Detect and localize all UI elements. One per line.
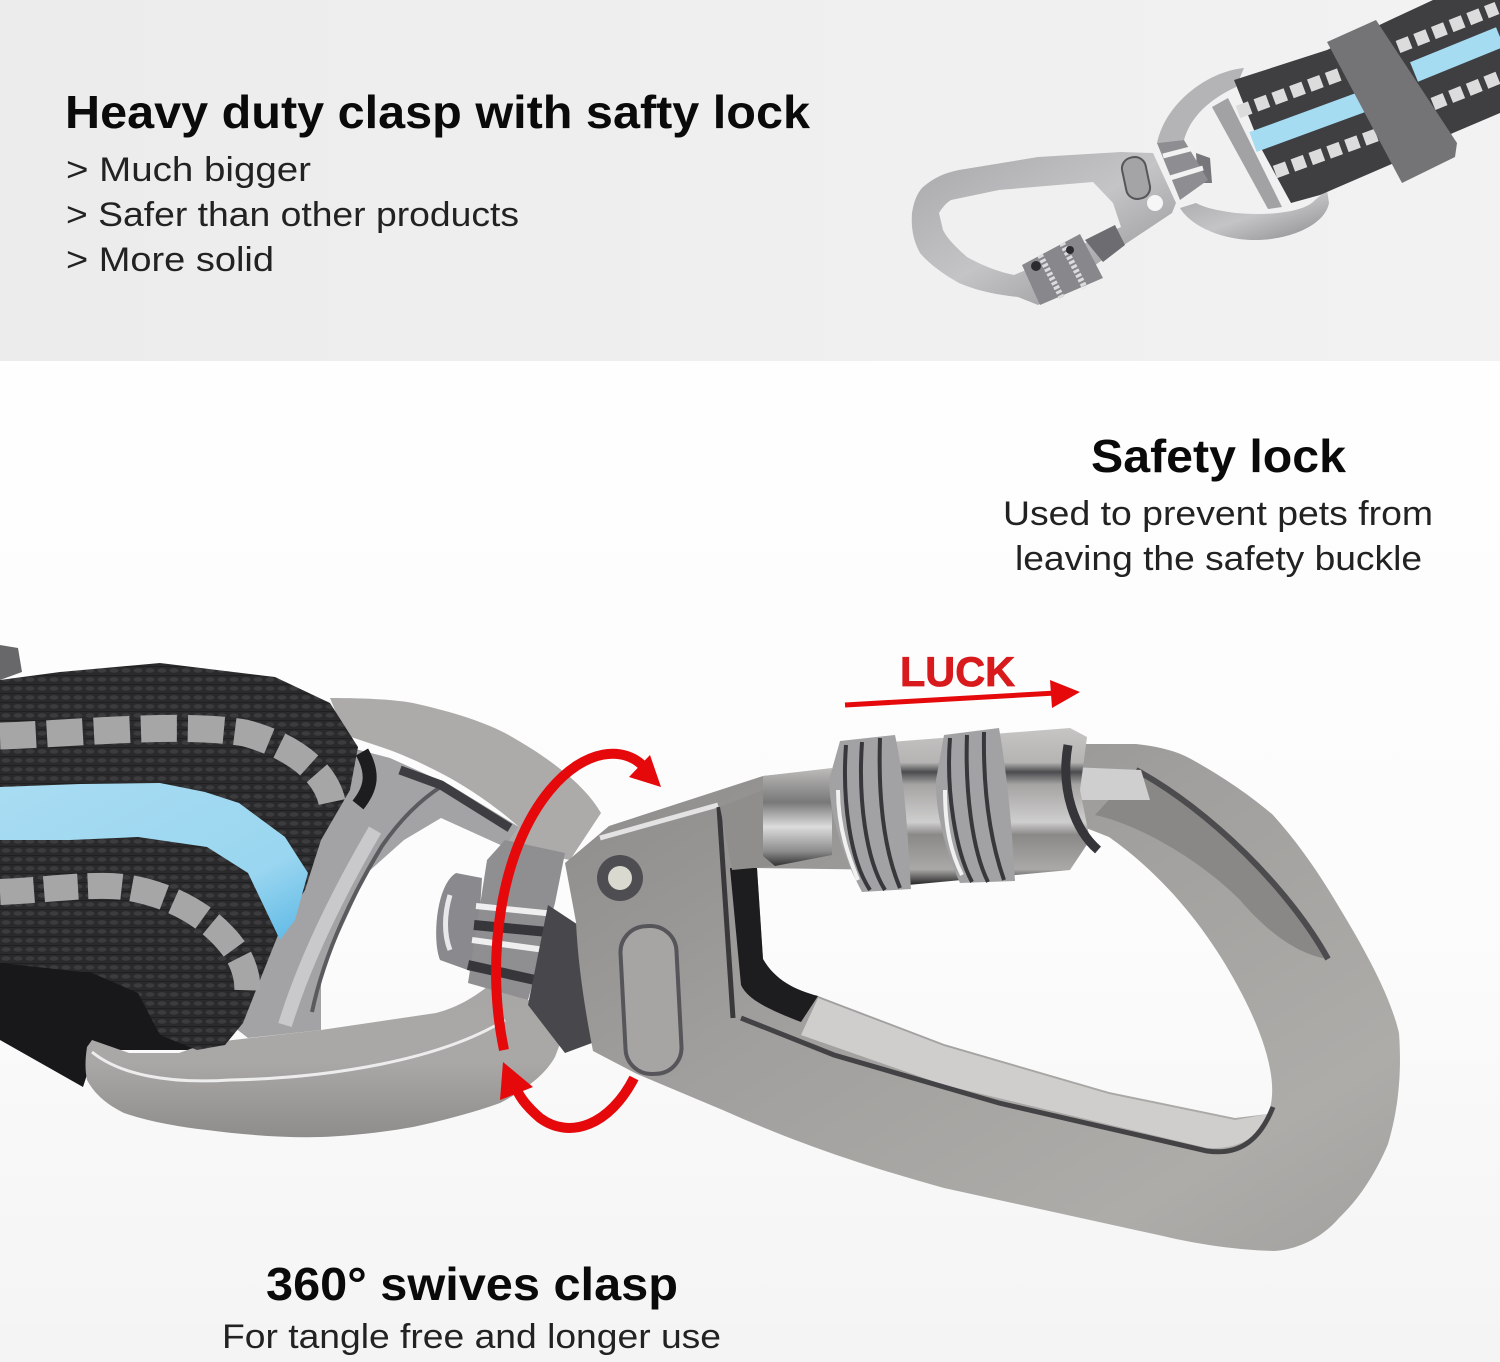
- text block: clasp benefits: > Much bigger: [66, 151, 311, 189]
- barrel body: [860, 728, 1090, 885]
- small swivel ring: [1157, 68, 1329, 240]
- text block: safety lock description: Used to prevent pets from: [1003, 495, 1433, 533]
- crossbar highlights: [285, 752, 510, 1025]
- arrow: lower rotation: [500, 1062, 634, 1128]
- inner dark edge: [741, 1018, 1273, 1152]
- swivel ring top band: [330, 698, 601, 860]
- upper plate highlight: [600, 805, 718, 838]
- swivel post: [436, 840, 601, 1053]
- text block: clasp benefits: [66, 151, 519, 279]
- product photo: small clasp and strap: [912, 0, 1500, 305]
- arrow: lock direction: [845, 680, 1080, 708]
- black gate recess: [730, 868, 818, 1022]
- heading: 360 swivel clasp: 360° swives clasp: [266, 1258, 678, 1310]
- small lock barrel: [1022, 225, 1125, 305]
- strap body: [0, 663, 358, 1050]
- ring left: [829, 735, 911, 892]
- heading: heavy duty clasp: Heavy duty clasp with safty lock: [65, 86, 810, 138]
- lock barrel: [829, 728, 1098, 892]
- hook upper shading: [1095, 770, 1328, 959]
- inner wall: [801, 998, 1268, 1148]
- text block: swivel description: For tangle free and longer use: [222, 1318, 721, 1356]
- swivel ring bottom band: [86, 987, 574, 1137]
- small keeper loop: [1327, 20, 1457, 183]
- small hole: [1147, 195, 1163, 211]
- gate plate: [720, 790, 775, 870]
- hook dark edge: [1136, 770, 1328, 959]
- reflective band upper: [0, 728, 332, 802]
- blue stripe: [0, 783, 308, 940]
- barrel gap: [1066, 745, 1098, 850]
- strap back loop: [0, 955, 205, 1087]
- panel: top background: [0, 0, 1500, 361]
- arrow: upper rotation: [496, 754, 661, 1050]
- ring edge highlight: [92, 1020, 505, 1081]
- slot: [619, 925, 683, 1075]
- label: luck: LUCK: [900, 648, 1015, 695]
- carabiner body: [565, 744, 1400, 1251]
- small strap: [1234, 0, 1500, 203]
- reflective band lower: [0, 886, 247, 1000]
- post rod: [1070, 767, 1150, 800]
- front strap: [0, 663, 358, 1050]
- gate rod: [763, 768, 832, 866]
- ring crossbar: [225, 745, 519, 1038]
- ring right: [936, 728, 1015, 883]
- keeper edge: [0, 645, 22, 680]
- plate dark edge: [719, 807, 733, 1018]
- product photo: large clasp close-up: [0, 645, 1400, 1251]
- text block: clasp benefits: > Safer than other products: [66, 196, 519, 234]
- small slot: [1120, 155, 1152, 201]
- text block: clasp benefits: > More solid: [66, 241, 274, 279]
- text block: safety lock description: [1003, 495, 1433, 578]
- small carabiner: [912, 152, 1176, 305]
- panel: lower background: [0, 361, 1500, 1362]
- rivet: [597, 855, 643, 901]
- shadow behind carabiner: [528, 905, 601, 1053]
- heading: safety lock: Safety lock: [1091, 430, 1346, 482]
- text block: safety lock description: leaving the safety buckle: [1015, 540, 1422, 578]
